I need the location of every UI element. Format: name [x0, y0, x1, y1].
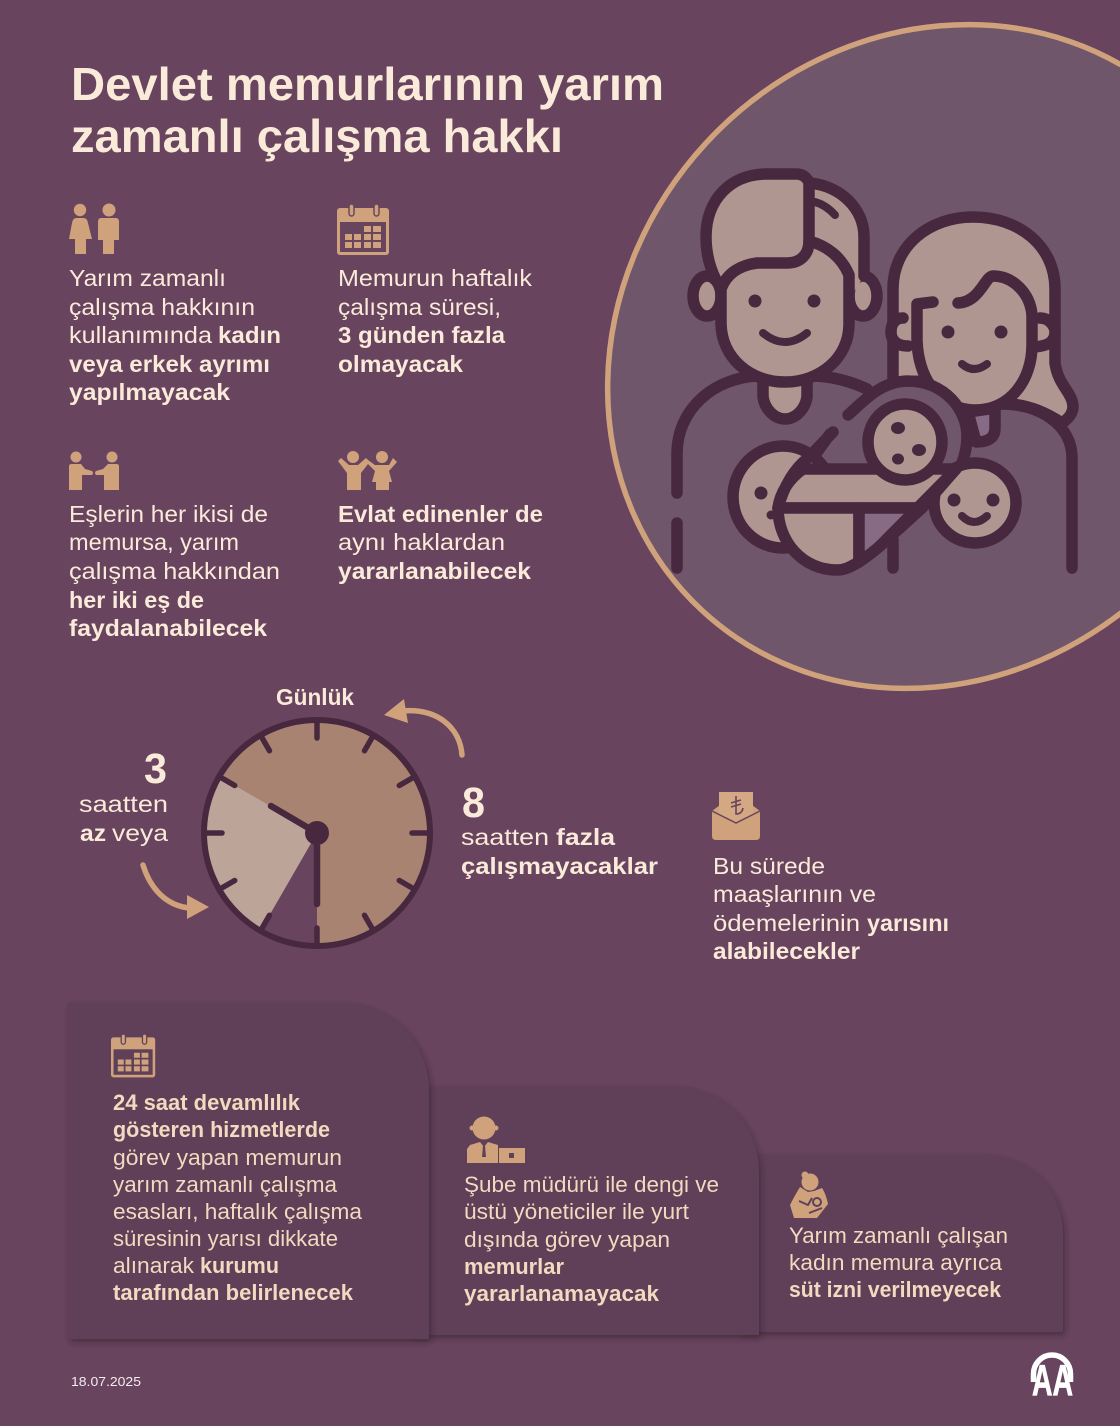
woman shoulder [1002, 404, 1072, 568]
text: 24-hour services: gösteren hizmetlerde [113, 1117, 330, 1142]
text block: gender: kadın [218, 322, 281, 348]
text block: spouses: çalışma hakkından [69, 558, 280, 584]
woman neck [968, 408, 995, 442]
text: 24-hour services: 24 saat devamlılık [113, 1090, 301, 1115]
icon: calendar small [111, 1034, 155, 1077]
icon: spouses [69, 452, 119, 490]
text: breastfeeding: süt izni verilmeyecek [789, 1277, 1002, 1302]
text block: 8 hours: saatten [461, 824, 549, 850]
text block: 8 hours: çalışmayacaklar [461, 853, 658, 879]
text block: spouses: faydalanabilecek [69, 615, 267, 641]
logo: AA [1032, 1355, 1073, 1405]
text block: weekly hours: 3 günden fazla [338, 322, 505, 348]
text block: salary: maaşlarının ve [713, 881, 876, 907]
text: 24-hour services: esasları, haftalık çalışma [113, 1199, 363, 1224]
text block: 8 hours [461, 779, 658, 879]
title [71, 58, 664, 162]
arrow: to 3 hours [143, 865, 209, 919]
text block: 3 hours: saatten [79, 791, 168, 817]
text block: adoption [338, 501, 543, 584]
text: managers: dışında görev yapan [464, 1227, 670, 1252]
text block: salary: Bu sürede [713, 853, 825, 879]
illustration: family in tilted circle [604, 22, 1120, 692]
text block: gender: çalışma hakkının [69, 294, 255, 320]
text block: spouses [69, 501, 280, 641]
panel: managers [410, 1087, 759, 1335]
text block: adoption: yararlanabilecek [338, 558, 531, 584]
text block: 3 hours: 3 [144, 745, 167, 793]
text block: salary: alabilecekler [713, 938, 860, 964]
text: breastfeeding: kadın memura ayrıca [789, 1250, 1003, 1275]
title: Devlet memurlarının yarım [71, 58, 664, 110]
left face [733, 446, 833, 548]
man face [721, 241, 849, 382]
blanket hood [820, 375, 972, 461]
text block: 8 hours: 8 [462, 779, 485, 827]
text: managers: yararlanamayacak [464, 1281, 660, 1306]
text: managers: üstü yöneticiler ile yurt [464, 1199, 689, 1224]
man hair [712, 180, 861, 291]
date: 18.07.2025 [71, 1374, 141, 1389]
icon: calendar [337, 204, 389, 255]
clock chart [204, 720, 430, 946]
man neck [763, 382, 807, 419]
right face [934, 463, 1016, 543]
text block: 3 hours: veya [112, 820, 168, 846]
text: managers: memurlar [464, 1254, 564, 1279]
man ears [693, 276, 721, 316]
icon: children [338, 451, 397, 490]
logo: AA: AA [1032, 1356, 1073, 1405]
man body [677, 376, 757, 493]
text: 24-hour services [113, 1090, 363, 1305]
text: 24-hour services: alınarak [113, 1253, 195, 1278]
icon: nursing mother [790, 1172, 828, 1218]
icon: manager at desk [467, 1116, 525, 1163]
text: 24-hour services: kurumu [200, 1253, 279, 1278]
text block: weekly hours: olmayacak [338, 351, 463, 377]
text block: spouses: memursa, yarım [69, 529, 239, 555]
text block: gender: kullanımında [69, 322, 212, 348]
text block: spouses: Eşlerin her ikisi de [69, 501, 268, 527]
text block: weekly hours: Memurun haftalık [338, 265, 533, 291]
text block: 3 hours [79, 745, 168, 846]
text: 24-hour services: tarafından belirlenecek [113, 1280, 354, 1305]
text: managers [464, 1172, 719, 1306]
woman face [931, 374, 1005, 404]
text: 24-hour services: süresinin yarısı dikkate [113, 1226, 338, 1251]
woman hair [893, 217, 1073, 423]
text block: salary: ödemelerinin [713, 910, 860, 936]
panel: 24-hour services [68, 1003, 429, 1339]
arrow: to 8 hours [384, 699, 462, 755]
text block: salary: yarısını [867, 910, 949, 936]
text block: gender: Yarım zamanlı [69, 265, 226, 291]
text block: gender [69, 265, 281, 405]
text block: weekly hours: çalışma süresi, [338, 294, 501, 320]
text block: weekly hours [338, 265, 533, 377]
text: breastfeeding: Yarım zamanlı çalışan [789, 1223, 1008, 1248]
icon: salary envelope [712, 792, 760, 840]
text block: adoption: aynı haklardan [338, 529, 505, 555]
title: zamanlı çalışma hakkı [71, 110, 563, 162]
text block: 8 hours: fazla [556, 824, 615, 850]
text: 24-hour services: görev yapan memurun [113, 1145, 342, 1170]
baby head [868, 404, 942, 480]
text: managers: Şube müdürü ile dengi ve [464, 1172, 719, 1197]
text block: adoption: Evlat edinenler de [338, 501, 543, 527]
blanket [778, 469, 956, 508]
text block: gender: yapılmayacak [69, 379, 230, 405]
text block: gender: veya erkek ayrımı [69, 351, 270, 377]
text block: salary [713, 853, 949, 964]
text block: 3 hours: az [80, 820, 106, 846]
text: breastfeeding [789, 1223, 1008, 1302]
panel: breastfeeding [740, 1155, 1063, 1332]
text: 24-hour services: yarım zamanlı çalışma [113, 1172, 338, 1197]
text block: spouses: her iki eş de [69, 587, 204, 613]
icon: woman and man [69, 204, 119, 254]
label: daily: Günlük [276, 684, 354, 710]
